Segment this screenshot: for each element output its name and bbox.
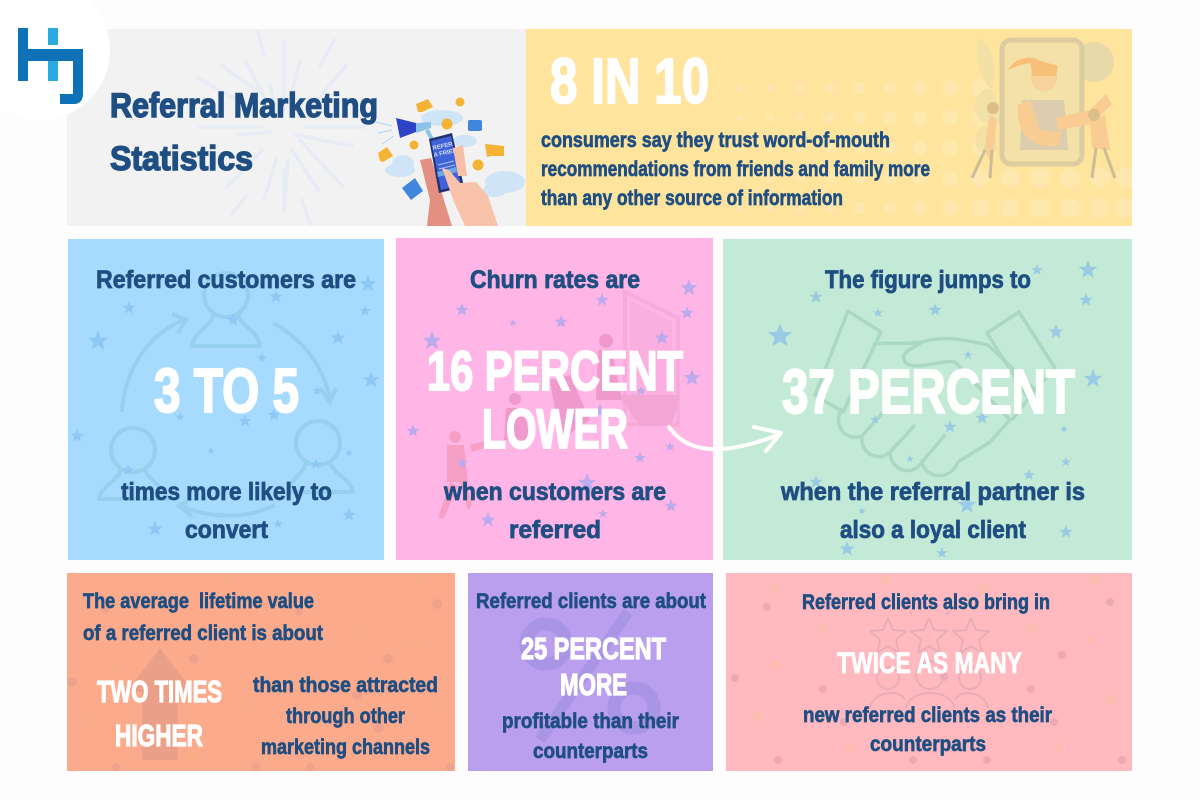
panel: two times higher: [67, 573, 455, 771]
panel: twice as many: [726, 573, 1132, 771]
text block: [121, 478, 332, 544]
text block: of a referred client is about: [83, 622, 323, 645]
text block: Referred clients are about: [476, 590, 706, 613]
panel: 16 percent lower: [396, 238, 713, 560]
sunburst decoration: [198, 32, 365, 224]
text block: The average lifetime value: [83, 590, 314, 613]
panel: 25 percent more: [468, 573, 713, 771]
stat: twice as many: TWICE AS MANY: [837, 647, 1022, 680]
stat: two times higher: [97, 674, 222, 753]
dots: [67, 599, 454, 771]
text block: profitable than their: [502, 710, 679, 733]
logo: [0, 0, 110, 120]
text block: times more likely to: [121, 478, 332, 506]
icon: rated clients: [870, 611, 989, 708]
text block: [443, 478, 666, 544]
illustration: influencer on phone: [972, 38, 1115, 178]
stat: two times higher: HIGHER: [115, 718, 203, 753]
text block: than those attracted: [253, 674, 438, 697]
icon: up arrow: [127, 648, 193, 760]
text block: [541, 129, 930, 210]
illustration: refer a friend phone: [376, 98, 525, 226]
text block: new referred clients as their: [803, 704, 1052, 727]
stat: 16 percent lower: LOWER: [482, 397, 628, 460]
illustration: people walking to door: [438, 292, 680, 518]
icon: percent sign: [526, 612, 654, 740]
text block: [83, 590, 323, 645]
panel: 3 to 5: [68, 239, 384, 560]
heading: [110, 87, 378, 178]
stat: 25 percent more: MORE: [560, 667, 627, 702]
text block: [780, 478, 1085, 544]
heading: Referral Marketing: [110, 87, 378, 125]
stars: [768, 260, 1102, 558]
panel: title: [67, 29, 526, 226]
text block: than any other source of information: [541, 187, 843, 210]
illustration: refer a friend phone: A FRIEND: [433, 147, 463, 159]
text block: counterparts: [533, 740, 648, 763]
stat: two times higher: TWO TIMES: [97, 674, 222, 709]
stat: 8 in 10: 8 IN 10: [550, 45, 709, 117]
text block: counterparts: [870, 733, 986, 756]
heading: Statistics: [110, 140, 253, 178]
panel: 37 percent: [723, 239, 1132, 560]
illustration: refer a friend phone: REFER: [432, 142, 454, 152]
stat: 16 percent lower: 16 PERCENT: [427, 339, 683, 402]
stars: [70, 275, 380, 535]
stat: 25 percent more: [521, 631, 666, 702]
heading: The figure jumps to: [825, 266, 1031, 294]
panel: 8 in 10: [526, 29, 1132, 226]
icon: handshake: [815, 311, 1055, 476]
heading: Churn rates are: [470, 266, 640, 294]
text block: referred: [509, 516, 601, 544]
text block: marketing channels: [261, 736, 430, 759]
text block: when the referral partner is: [780, 478, 1085, 506]
text block: [253, 674, 438, 759]
stat: 37 percent: 37 PERCENT: [782, 358, 1075, 427]
stat: 16 percent lower: [427, 339, 683, 460]
text block: also a loyal client: [840, 516, 1027, 544]
heading: Referred customers are: [96, 266, 356, 294]
text block: when customers are: [443, 478, 666, 506]
text block: recommendations from friends and family more: [541, 158, 930, 181]
icon: referral cycle people: [99, 273, 353, 516]
text block: [502, 710, 679, 763]
stat: 25 percent more: 25 PERCENT: [521, 631, 666, 666]
text block: convert: [185, 516, 269, 544]
dots: [731, 598, 1126, 764]
arrow: 16 percent to 37 percent: [669, 427, 781, 451]
text block: consumers say they trust word-of-mouth: [541, 129, 890, 152]
stars: [406, 279, 701, 526]
stat: 3 to 5: 3 TO 5: [154, 357, 299, 426]
heading: Referred clients also bring in: [802, 591, 1050, 614]
text block: through other: [286, 705, 405, 728]
text block: [803, 704, 1052, 756]
